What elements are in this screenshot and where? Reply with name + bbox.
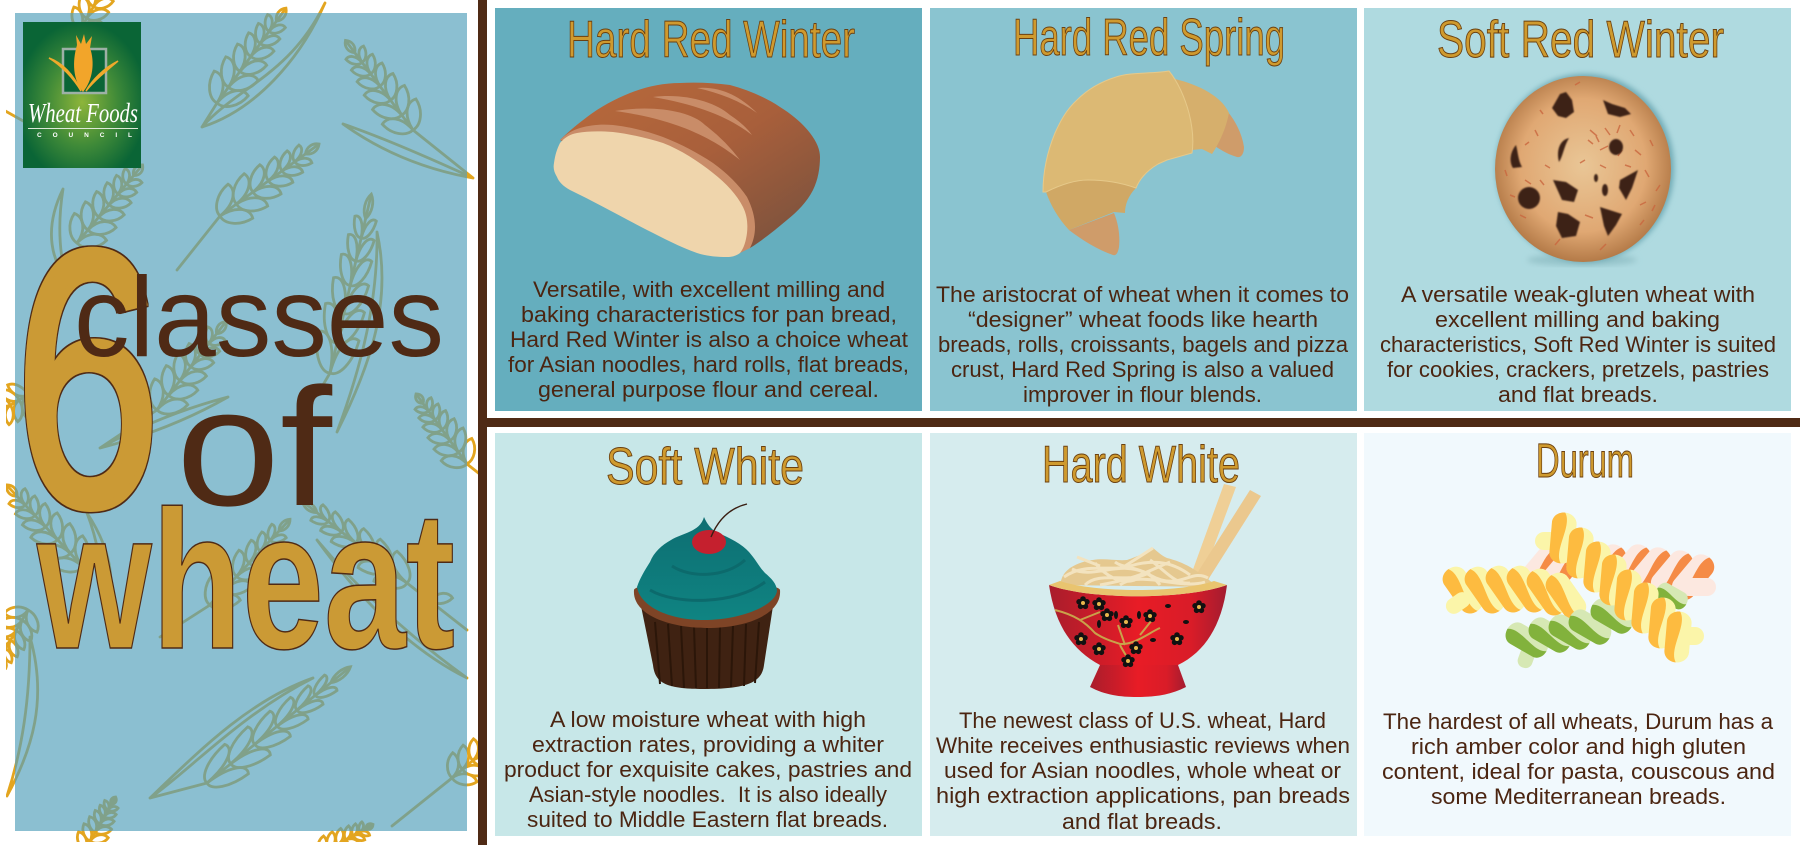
vertical divider — [478, 0, 487, 845]
description: for cookies, crackers, pretzels, pastries — [1387, 357, 1769, 382]
description: product for exquisite cakes, pastries and — [504, 757, 912, 782]
description — [504, 707, 912, 832]
description: excellent milling and baking — [1435, 307, 1720, 332]
description: crust, Hard Red Spring is also a valued — [951, 357, 1334, 382]
description: The hardest of all wheats, Durum has a — [1383, 709, 1774, 734]
description — [1380, 282, 1776, 407]
heading: Soft White — [606, 438, 804, 496]
panel: Hard Red Winter — [495, 8, 922, 411]
description: content, ideal for pasta, couscous and — [1382, 759, 1775, 784]
panel: Soft White — [495, 433, 922, 836]
description: Versatile, with excellent milling and — [533, 277, 885, 302]
description: “designer” wheat foods like hearth — [968, 307, 1318, 332]
icon: Wheat Foods Council logo — [23, 22, 141, 168]
description: A low moisture wheat with high — [550, 707, 866, 732]
description: The newest class of U.S. wheat, Hard — [959, 708, 1326, 733]
icon: noodle bowl — [1049, 484, 1261, 697]
icon: Wheat Foods Council logo: Wheat Foods — [28, 98, 138, 128]
title: of: of — [176, 353, 332, 541]
description: extraction rates, providing a whiter — [532, 732, 884, 757]
icon: bread loaf — [554, 83, 820, 257]
description: high extraction applications, pan breads — [936, 783, 1350, 808]
description: White receives enthusiastic reviews when — [936, 733, 1350, 758]
description: Hard Red Winter is also a choice wheat — [510, 327, 908, 352]
description: and flat breads. — [1498, 382, 1658, 407]
icon: cookie — [1495, 74, 1674, 266]
panel: Soft Red Winter — [1364, 8, 1791, 411]
icon: cupcake — [634, 504, 780, 689]
heading: Hard Red Winter — [567, 11, 855, 69]
title: wheat: wheat — [36, 470, 455, 690]
panel: Hard White — [930, 433, 1357, 836]
description: rich amber color and high gluten — [1411, 734, 1746, 759]
title: 6: 6 — [15, 176, 160, 581]
description: A versatile weak-gluten wheat with — [1401, 282, 1755, 307]
heading: Durum — [1536, 435, 1634, 488]
description: suited to Middle Eastern flat breads. — [527, 807, 888, 832]
description — [508, 277, 909, 402]
icon: croissant — [1043, 71, 1244, 255]
description: characteristics, Soft Red Winter is suited — [1380, 332, 1776, 357]
description: breads, rolls, croissants, bagels and pizza — [938, 332, 1349, 357]
icon: Wheat Foods Council logo: COUNCIL — [37, 132, 132, 139]
description — [1382, 709, 1775, 809]
description: used for Asian noodles, whole wheat or — [944, 758, 1341, 783]
title: classes: classes — [74, 254, 444, 380]
description: and flat breads. — [1062, 809, 1222, 834]
icon: fusilli pasta — [1438, 512, 1719, 670]
description: general purpose flour and cereal. — [538, 377, 879, 402]
heading: Soft Red Winter — [1437, 11, 1724, 69]
description: improver in flour blends. — [1023, 382, 1262, 407]
panel: Durum — [1364, 433, 1791, 836]
description — [936, 708, 1350, 834]
heading: Hard Red Spring — [1013, 9, 1285, 67]
description: baking characteristics for pan bread, — [521, 302, 897, 327]
horizontal divider — [487, 418, 1800, 427]
panel: title — [0, 0, 527, 845]
description: Asian-style noodles. It is also ideally — [529, 782, 887, 807]
description: some Mediterranean breads. — [1431, 784, 1726, 809]
description — [936, 282, 1349, 407]
panel: Hard Red Spring — [930, 8, 1357, 411]
wheat stalk pattern — [0, 0, 527, 845]
description: The aristocrat of wheat when it comes to — [936, 282, 1349, 307]
heading: Hard White — [1042, 436, 1240, 494]
description: for Asian noodles, hard rolls, flat breads, — [508, 352, 909, 377]
